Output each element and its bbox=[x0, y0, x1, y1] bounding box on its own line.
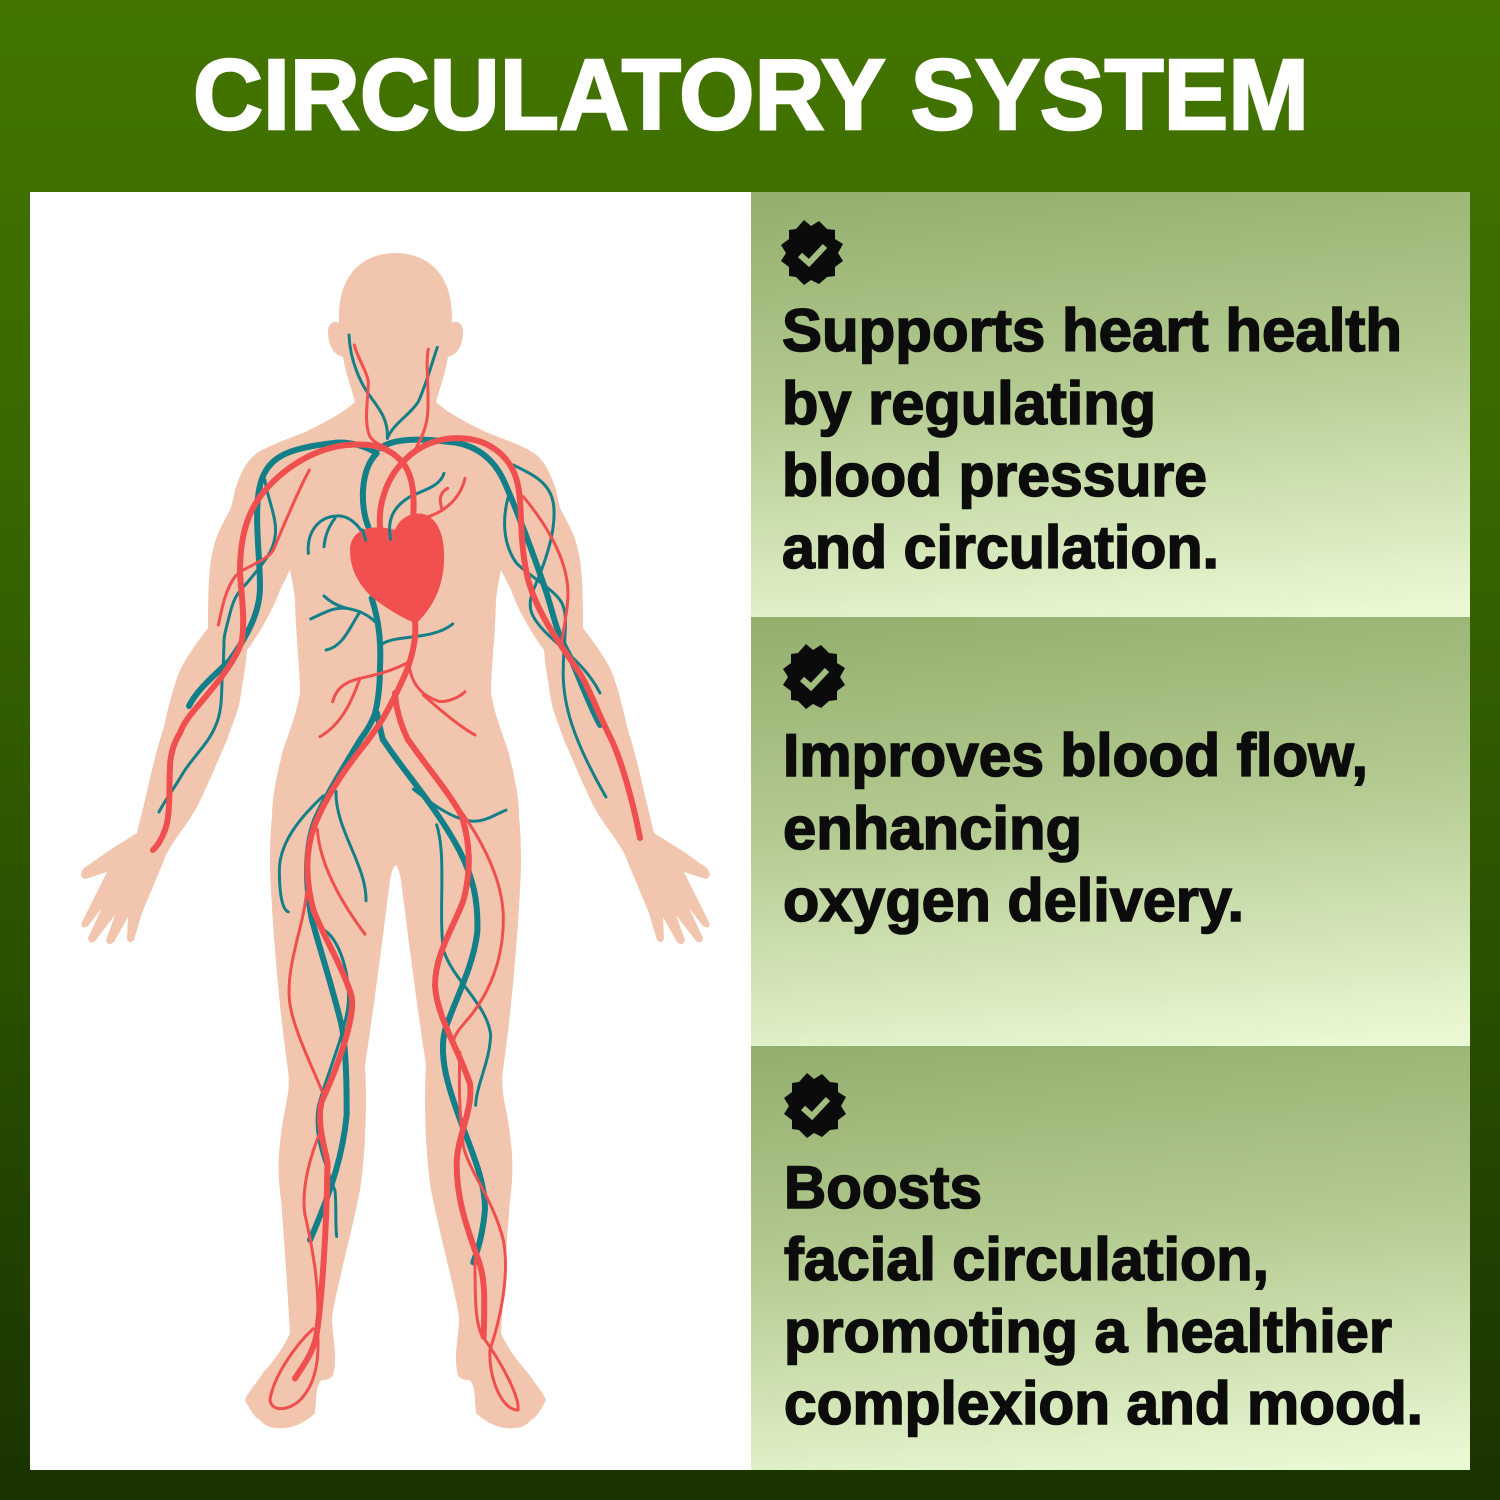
panel: benefit 2 bbox=[751, 617, 1470, 1046]
benefit text: Improves blood flow, bbox=[783, 722, 1368, 789]
icon: check badge bbox=[783, 644, 845, 709]
benefit 2 content bbox=[783, 644, 1368, 935]
benefit 3 content bbox=[784, 1073, 1423, 1438]
veins and arteries of the legs bbox=[270, 740, 518, 1410]
benefit text bbox=[782, 297, 1402, 581]
benefit text: promoting a healthier bbox=[784, 1298, 1392, 1365]
title: CIRCULATORY SYSTEM bbox=[193, 39, 1309, 151]
icon: check badge bbox=[781, 220, 843, 285]
benefit 1 content bbox=[781, 220, 1402, 581]
benefit text: and circulation. bbox=[782, 514, 1219, 581]
benefit text: Boosts bbox=[784, 1154, 982, 1221]
illustration: human circulatory system bbox=[81, 253, 710, 1428]
benefit text: complexion and mood. bbox=[784, 1370, 1423, 1437]
panel: benefit 1 bbox=[751, 192, 1470, 617]
icon: heart bbox=[350, 513, 444, 623]
benefit text bbox=[784, 1154, 1423, 1437]
veins and arteries of the torso and arms bbox=[153, 335, 640, 850]
benefit text: enhancing bbox=[783, 795, 1082, 862]
benefit text bbox=[783, 722, 1368, 934]
body silhouette bbox=[81, 253, 710, 1428]
benefit text: oxygen delivery. bbox=[783, 867, 1244, 934]
icon: check badge bbox=[784, 1073, 846, 1138]
benefit text: facial circulation, bbox=[784, 1226, 1269, 1293]
panel: benefit 3 bbox=[751, 1046, 1470, 1470]
benefit text: Supports heart health bbox=[782, 297, 1402, 364]
benefit text: by regulating bbox=[782, 370, 1156, 437]
benefit text: blood pressure bbox=[782, 442, 1207, 509]
panel: body illustration bbox=[30, 192, 751, 1470]
